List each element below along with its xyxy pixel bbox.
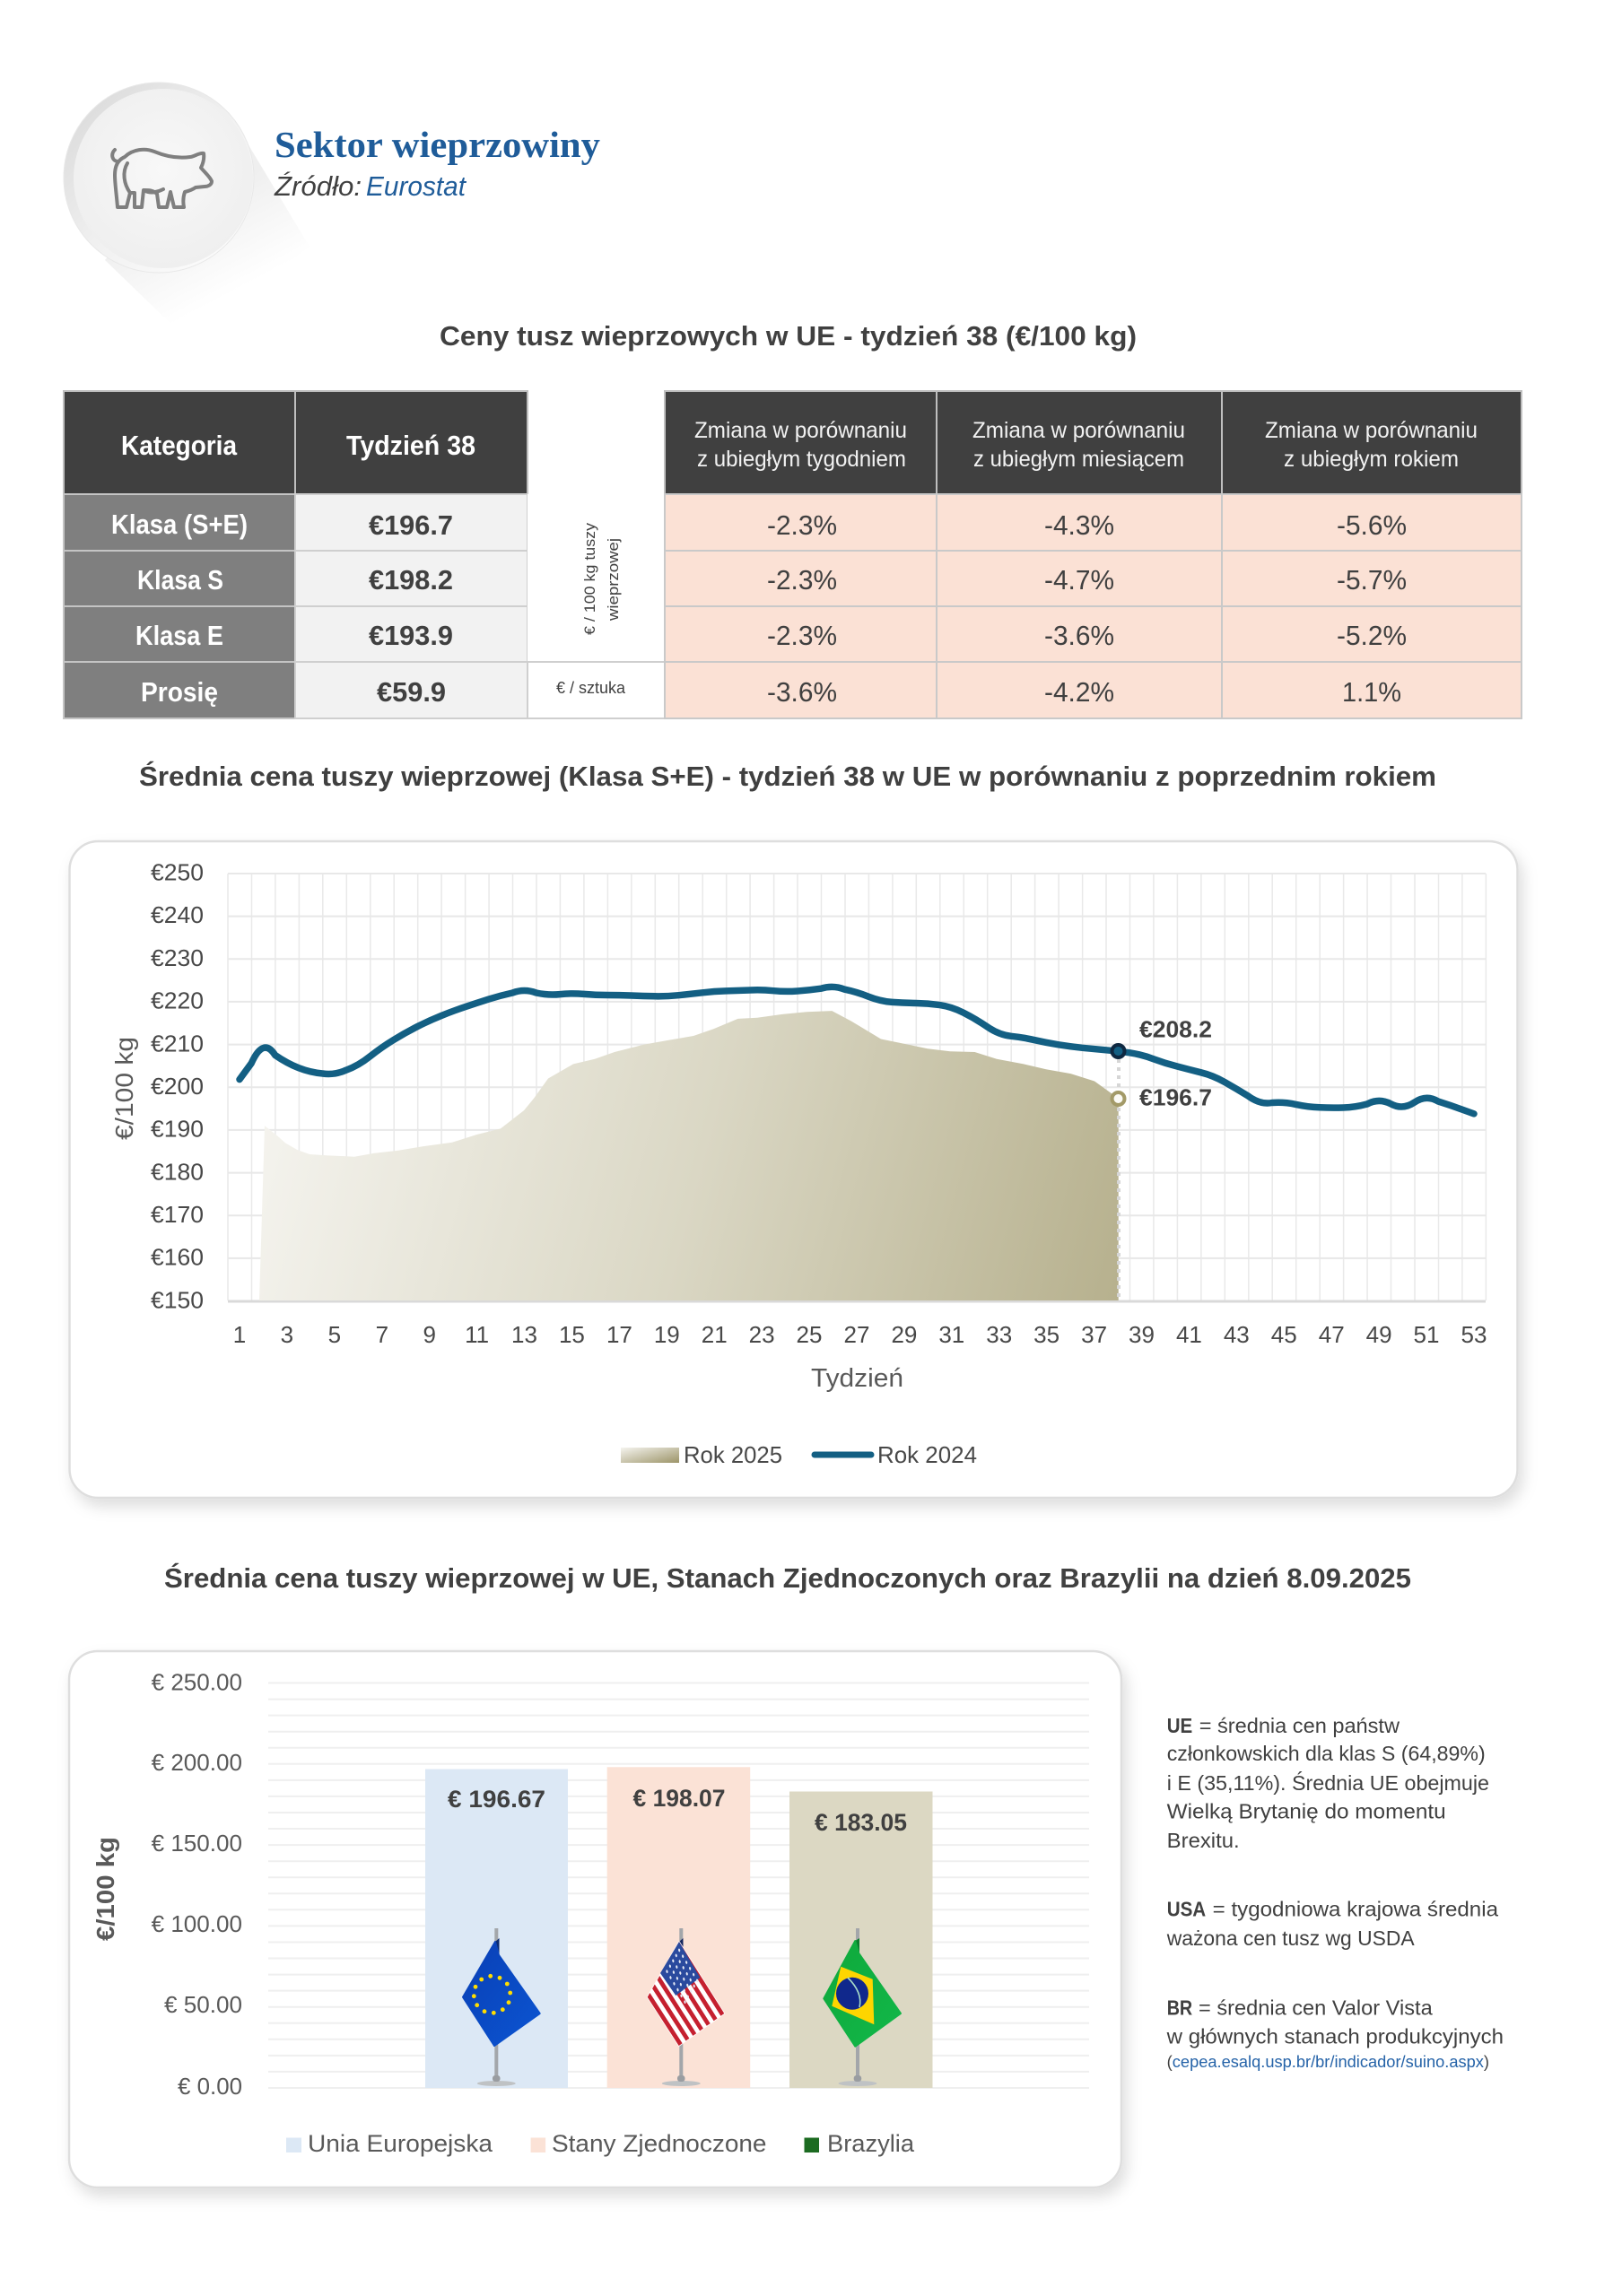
- heading: line chart title: Średnia cena tuszy wieprzowej (Klasa S+E) - tydzień 38 w UE w porównaniu z poprzednim rokiem: [139, 760, 1436, 792]
- y axis title: €/100 kg: [92, 1837, 119, 1941]
- y axis labels: €200: [151, 1073, 204, 1100]
- week values: €193.9: [369, 620, 453, 651]
- x axis labels: 23: [749, 1321, 775, 1348]
- change values: -3.6%: [767, 676, 837, 708]
- x axis labels: [233, 1321, 1487, 1348]
- legend: [621, 1441, 977, 1468]
- header: pig badge with long shadow: [64, 83, 310, 341]
- icon: Brazil flag: [824, 1928, 901, 2086]
- y axis labels: [151, 859, 204, 1313]
- x axis labels: 11: [465, 1321, 489, 1348]
- category cells: [64, 494, 295, 718]
- text block: Brazil note: (cepea.esalq.usp.br/br/indicador/suino.aspx ): [1167, 2053, 1489, 2071]
- header labels: Kategoria: [121, 430, 238, 461]
- x axis title: Tydzień: [811, 1364, 903, 1393]
- y axis labels: €160: [151, 1244, 204, 1271]
- source line: Źródło:: [274, 170, 362, 202]
- text block: USA note: USA: [1167, 1898, 1206, 1921]
- header labels: z ubiegłym miesiącem: [973, 447, 1184, 472]
- table: carcass prices: [64, 391, 1522, 718]
- unit: per 100 kg: € / 100 kg tuszy: [581, 522, 598, 635]
- change values: -5.2%: [1337, 620, 1407, 651]
- text block: Brazil note: = średnia cen Valor Vista: [1199, 1996, 1434, 2020]
- category labels: Klasa (S+E): [111, 509, 248, 540]
- x axis labels: 5: [328, 1321, 341, 1348]
- callout: 208.2: €208.2: [1139, 1016, 1212, 1043]
- text block: USA note: = tygodniowa krajowa średnia: [1213, 1898, 1499, 1921]
- y axis labels: €170: [151, 1201, 204, 1228]
- source line: Eurostat: [366, 170, 467, 202]
- table header cells: [64, 391, 1522, 494]
- text block: USA note: ważona cen tusz wg USDA: [1166, 1926, 1415, 1950]
- x axis labels: 1: [233, 1321, 246, 1348]
- text block: EU note: UE: [1167, 1714, 1192, 1737]
- x axis labels: 19: [654, 1321, 680, 1348]
- x axis labels: 37: [1081, 1321, 1107, 1348]
- legend: Rok 2025: [684, 1441, 782, 1468]
- category labels: [111, 509, 248, 708]
- legend: Unia Europejska: [308, 2130, 493, 2157]
- x axis labels: 3: [281, 1321, 293, 1348]
- callout: 196.7: €196.7: [1139, 1083, 1212, 1110]
- x axis labels: 21: [702, 1321, 728, 1348]
- category labels: Klasa E: [135, 620, 223, 651]
- text block: EU note: i E (35,11%). Średnia UE obejmuje: [1167, 1770, 1489, 1795]
- change values: -4.7%: [1044, 564, 1114, 596]
- legend: Brazylia: [827, 2130, 915, 2157]
- x axis labels: 53: [1461, 1321, 1487, 1348]
- bar: EU: [425, 1769, 568, 2088]
- x axis labels: 29: [891, 1321, 917, 1348]
- y axis labels: € 100.00: [152, 1910, 242, 1937]
- text block: EU note: Brexitu.: [1167, 1829, 1240, 1852]
- change values: -2.3%: [767, 509, 837, 541]
- panel: weekly price chart: [70, 841, 1518, 1498]
- legend: Rok 2024: [877, 1441, 977, 1468]
- header labels: z ubiegłym rokiem: [1284, 447, 1459, 472]
- category labels: Klasa S: [137, 564, 223, 596]
- unit cells: [528, 494, 665, 718]
- change values: 1.1%: [1342, 676, 1401, 708]
- week values: €198.2: [369, 564, 453, 596]
- y axis labels: €240: [151, 901, 204, 928]
- marker: 2024 week 38: [1112, 1045, 1125, 1057]
- week values: €196.7: [369, 509, 453, 541]
- unit: per 100 kg: [581, 522, 622, 635]
- line series: 2024: [240, 987, 1474, 1114]
- header labels: Zmiana w porównaniu: [1265, 418, 1478, 443]
- source line: [274, 170, 467, 202]
- icon: pig: [112, 150, 212, 207]
- icon: EU flag: [463, 1928, 540, 2086]
- heading: bar chart title: Średnia cena tuszy wieprzowej w UE, Stanach Zjednoczonych oraz Brazylii na dzień 8.09.2025: [164, 1561, 1411, 1594]
- change values: -5.6%: [1337, 509, 1407, 541]
- x axis labels: 17: [606, 1321, 632, 1348]
- text block: EU note: [1167, 1714, 1489, 1852]
- unit: per 100 kg: wieprzowej: [605, 538, 622, 622]
- week values: [369, 509, 453, 708]
- category labels: Prosię: [141, 676, 218, 708]
- x axis labels: 25: [797, 1321, 822, 1348]
- x axis labels: 33: [986, 1321, 1012, 1348]
- y axis labels: €150: [151, 1286, 204, 1313]
- text block: USA note: [1166, 1898, 1499, 1950]
- area series: 2025: [259, 1011, 1119, 1300]
- y axis labels: €230: [151, 944, 204, 971]
- unit: per piece: € / sztuka: [556, 679, 626, 697]
- text block: Brazil note: w głównych stanach produkcyjnych: [1166, 2024, 1504, 2048]
- heading: sector title: Sektor wieprzowiny: [275, 124, 601, 165]
- x axis labels: 45: [1271, 1321, 1297, 1348]
- x axis labels: 47: [1319, 1321, 1345, 1348]
- heading: table title: Ceny tusz wieprzowych w UE - tydzień 38 (€/100 kg): [440, 320, 1137, 352]
- change values: -2.3%: [767, 564, 837, 596]
- x axis labels: 15: [559, 1321, 585, 1348]
- text block: Brazil note: [1166, 1996, 1504, 2071]
- header labels: Zmiana w porównaniu: [972, 418, 1185, 443]
- x axis labels: 35: [1033, 1321, 1060, 1348]
- marker: 2025 week 38: [1112, 1092, 1125, 1105]
- value: Brazil: € 183.05: [815, 1809, 907, 1836]
- y axis labels: € 200.00: [152, 1749, 242, 1776]
- y axis labels: €220: [151, 987, 204, 1014]
- change values: -4.3%: [1044, 509, 1114, 541]
- y axis labels: €180: [151, 1158, 204, 1185]
- week values: €59.9: [377, 676, 446, 708]
- y axis labels: €250: [151, 859, 204, 886]
- y axis title: €/100 kg: [110, 1037, 138, 1140]
- week value cells: [295, 494, 528, 718]
- legend: Stany Zjednoczone: [552, 2130, 766, 2157]
- week 38 drop line: [1117, 1051, 1121, 1300]
- bar: USA: [607, 1767, 750, 2088]
- value: USA: € 198.07: [633, 1785, 725, 1812]
- y axis labels: [152, 1668, 242, 2100]
- bar: Brazil: [789, 1792, 933, 2088]
- x axis labels: 41: [1176, 1321, 1202, 1348]
- x axis labels: 9: [423, 1321, 436, 1348]
- value: EU: € 196.67: [448, 1786, 545, 1813]
- change values: -2.3%: [767, 620, 837, 651]
- x axis labels: 13: [511, 1321, 537, 1348]
- text block: EU note: = średnia cen państw: [1199, 1714, 1400, 1737]
- text block: EU note: Wielką Brytanię do momentu: [1167, 1800, 1446, 1823]
- legend: [286, 2130, 915, 2157]
- x axis labels: 49: [1366, 1321, 1392, 1348]
- header labels: Tydzień 38: [346, 430, 475, 461]
- x axis labels: 43: [1224, 1321, 1250, 1348]
- change values: -5.7%: [1337, 564, 1407, 596]
- x axis labels: 27: [844, 1321, 869, 1348]
- text block: Brazil note: BR: [1167, 1996, 1192, 2020]
- panel: price comparison bar chart: [69, 1651, 1121, 2187]
- y axis labels: € 0.00: [178, 2073, 242, 2100]
- header labels: Zmiana w porównaniu: [694, 418, 907, 443]
- change values: -4.2%: [1044, 676, 1114, 708]
- x axis labels: 31: [938, 1321, 964, 1348]
- header labels: z ubiegłym tygodniem: [697, 447, 906, 472]
- header labels: [121, 418, 1478, 472]
- icon: USA flag: [648, 1928, 724, 2086]
- text block: EU note: członkowskich dla klas S (64,89%): [1167, 1742, 1486, 1765]
- x axis labels: 51: [1414, 1321, 1439, 1348]
- y axis labels: € 50.00: [164, 1991, 242, 2018]
- y axis labels: € 250.00: [152, 1668, 242, 1695]
- change cells: [665, 494, 1522, 718]
- x axis labels: 7: [376, 1321, 388, 1348]
- y axis labels: €210: [151, 1030, 204, 1057]
- y axis labels: € 150.00: [152, 1830, 242, 1857]
- y axis labels: €190: [151, 1116, 204, 1143]
- change values: -3.6%: [1044, 620, 1114, 651]
- x axis labels: 39: [1129, 1321, 1155, 1348]
- change values: [767, 509, 1407, 708]
